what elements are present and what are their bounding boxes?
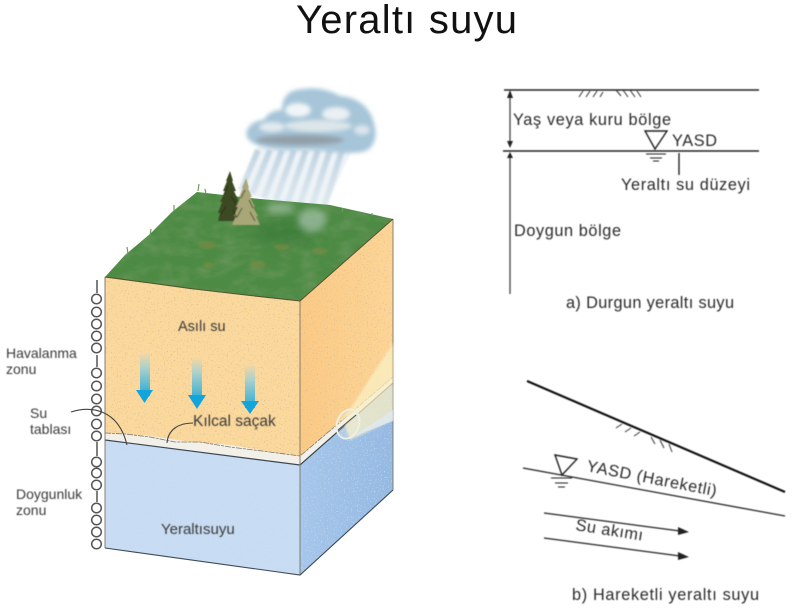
icon: water level triangle (645, 131, 667, 161)
front: groundwater (105, 440, 300, 575)
slope lines (527, 381, 785, 492)
arrows: percolation (136, 352, 259, 414)
labels: b: Su akımı (574, 516, 644, 545)
slope hatch (616, 424, 672, 452)
capillary fringe (105, 377, 393, 465)
labels: soil block: Havalanma (6, 345, 77, 361)
labels: a: YASD (672, 132, 717, 150)
icon: water level triangle (551, 455, 577, 487)
magnifier beam (333, 343, 393, 442)
labels: soil block: tablası (30, 421, 71, 437)
grass top surface (105, 192, 393, 301)
labels: soil block: Su (30, 405, 47, 421)
panel: soil block diagram (6, 88, 393, 575)
flow arrows (544, 513, 689, 560)
labels: soil block: Asılı su (178, 319, 226, 335)
labels: a (513, 111, 750, 312)
edges (105, 219, 393, 575)
ground hatch (579, 90, 641, 97)
chain: zone indicator (92, 280, 101, 549)
rain (238, 146, 352, 214)
mist (298, 208, 326, 232)
ground and water lines (503, 90, 759, 151)
labels: a: Doygun bölge (514, 222, 621, 240)
icon: cloud (246, 88, 376, 153)
right side: groundwater (300, 383, 393, 575)
dark tree (218, 171, 241, 221)
labels: a: Yaş veya kuru bölge (513, 111, 671, 129)
labels: soil block (6, 319, 276, 538)
labels: soil block: Yeraltısuyu (161, 521, 235, 538)
light tree (232, 178, 260, 225)
dimension arrows (507, 90, 513, 294)
labels: b: b) Hareketli yeraltı suyu (572, 586, 759, 604)
level leader (678, 153, 680, 175)
leader lines (71, 409, 193, 445)
labels: soil block: Doygunluk (16, 486, 83, 502)
labels: soil block: zonu (16, 502, 46, 518)
labels: a: Yeraltı su düzeyi (621, 176, 750, 194)
labels: soil block: Kılcal saçak (193, 413, 276, 430)
grass tufts and surface edge (127, 184, 372, 254)
panel: b) moving groundwater (523, 381, 785, 604)
labels: a: a) Durgun yeraltı suyu (566, 294, 734, 312)
icon: trees (218, 171, 260, 225)
panel: a) still groundwater (503, 90, 759, 312)
front: sand (105, 277, 300, 456)
grass patches (198, 241, 328, 269)
grass shading (251, 220, 319, 244)
right side: sand (300, 219, 393, 456)
labels: b (572, 457, 759, 604)
labels: soil block: zonu (6, 361, 36, 377)
labels: b: YASD (Hareketli) (585, 457, 718, 500)
